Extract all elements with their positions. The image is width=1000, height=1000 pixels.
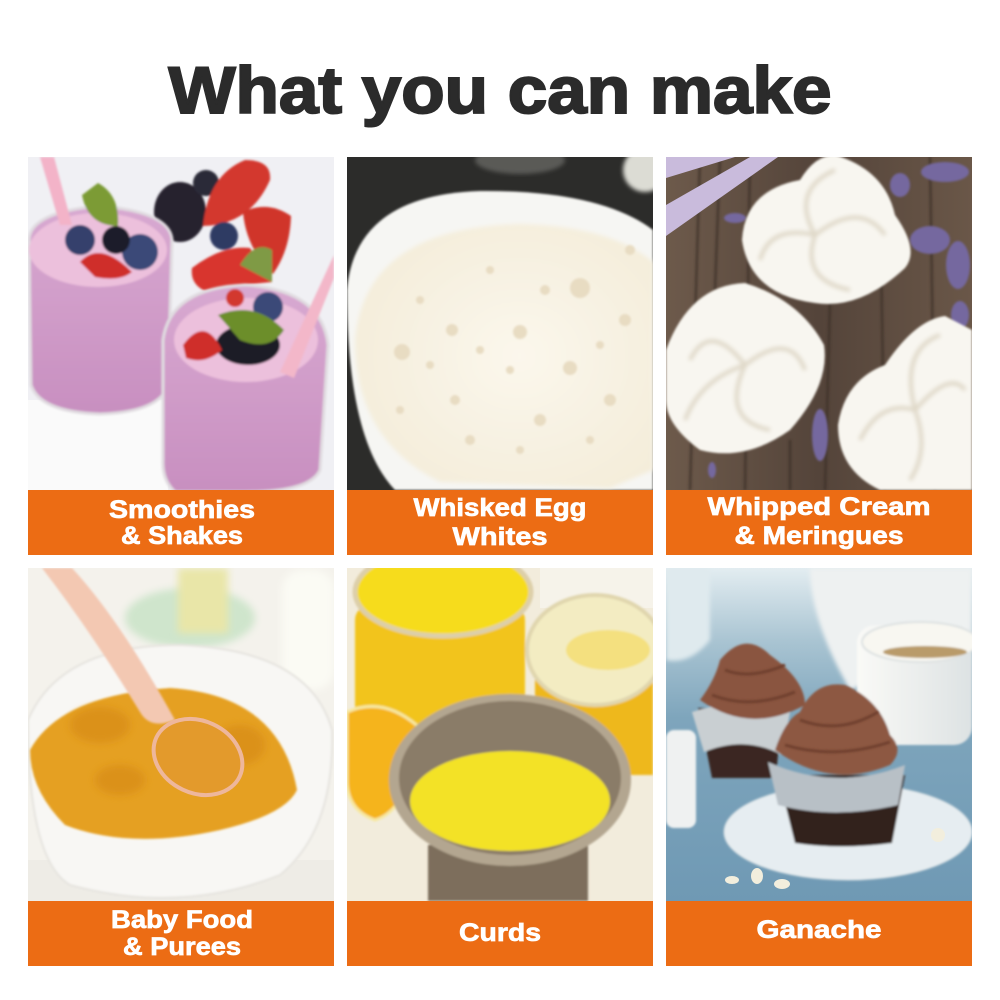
glass left xyxy=(29,206,172,414)
label: & Purees xyxy=(123,933,241,961)
label: Baby Food xyxy=(111,906,253,934)
photo: smoothies xyxy=(28,157,334,492)
label: & Meringues xyxy=(734,522,904,550)
label: Curds xyxy=(459,919,541,947)
label: Whites xyxy=(452,523,548,551)
straws xyxy=(40,157,72,225)
photo: ganache xyxy=(666,568,978,901)
label xyxy=(666,901,972,966)
label xyxy=(28,490,334,555)
photo: baby food xyxy=(28,568,334,901)
label xyxy=(347,901,653,966)
label: Whisked Egg xyxy=(414,494,586,522)
label: Ganache xyxy=(756,916,882,944)
label: Smoothies xyxy=(109,496,255,524)
label xyxy=(666,490,972,555)
photo: curds xyxy=(347,548,663,901)
label xyxy=(28,901,334,966)
panel: whisked egg whites xyxy=(347,146,667,555)
glass right xyxy=(163,285,328,492)
panel: smoothies and shakes xyxy=(28,157,334,555)
photo: egg whites xyxy=(347,146,667,490)
berries xyxy=(65,225,95,255)
panel: whipped cream and meringues xyxy=(666,155,972,555)
label xyxy=(347,490,653,555)
label: & Shakes xyxy=(121,522,243,550)
label: Whipped Cream xyxy=(708,493,930,521)
photo: meringues xyxy=(666,155,972,490)
panel: curds xyxy=(347,548,663,966)
title: What you can make xyxy=(168,53,831,127)
panel: ganache xyxy=(666,568,978,966)
panel: baby food and purees xyxy=(28,568,334,966)
